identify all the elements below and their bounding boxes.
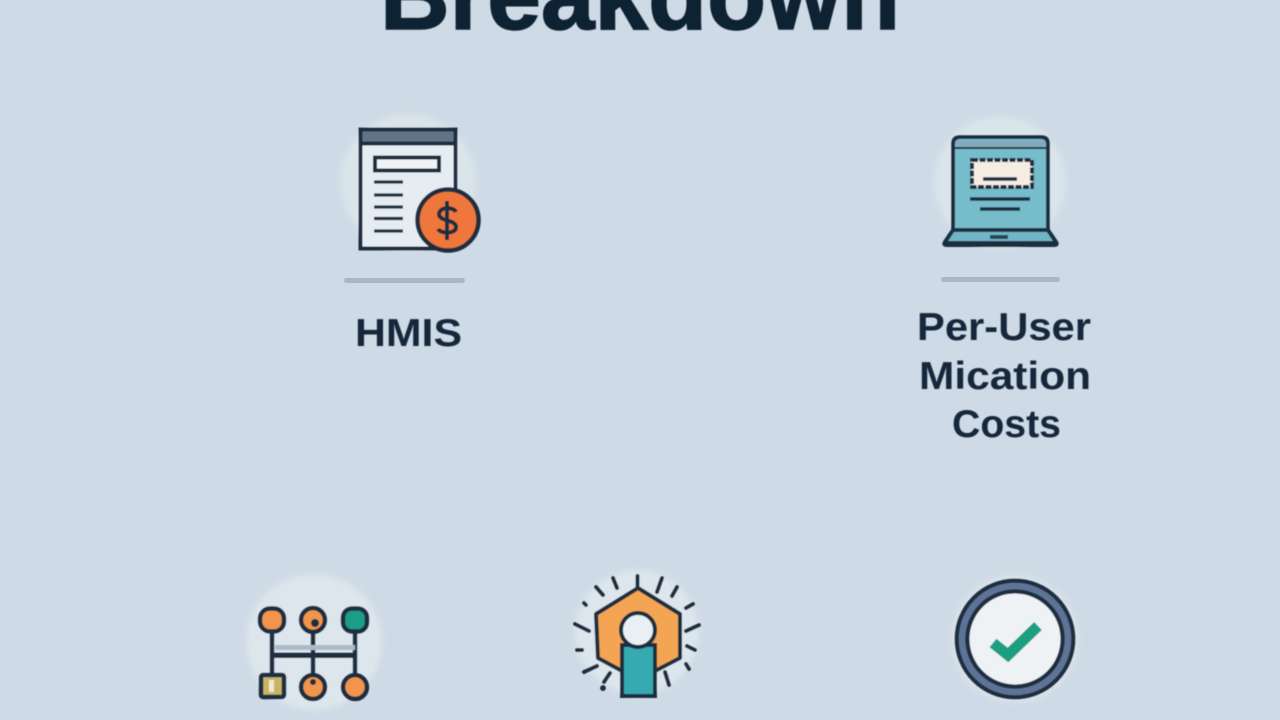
label: Per-User Mication Costs: Per-User	[917, 306, 1091, 349]
label: Per-User Mication Costs: Costs	[952, 403, 1061, 446]
panel: HMIS	[340, 114, 478, 355]
icon: check mark in circle	[952, 576, 1078, 702]
icon: network of connected nodes	[246, 574, 382, 710]
label: Per-User Mication Costs: Mication	[919, 355, 1091, 398]
divider	[344, 278, 465, 283]
icon: laptop	[934, 116, 1066, 248]
icon: invoice document with dollar coin	[340, 114, 478, 250]
panel: Per-User Mication Costs	[917, 116, 1091, 446]
label: Per-User Mication Costs	[917, 306, 1091, 446]
divider	[941, 277, 1060, 282]
label: HMIS: HMIS	[355, 312, 462, 355]
icon: hexagon keyhole with rays	[575, 570, 699, 696]
